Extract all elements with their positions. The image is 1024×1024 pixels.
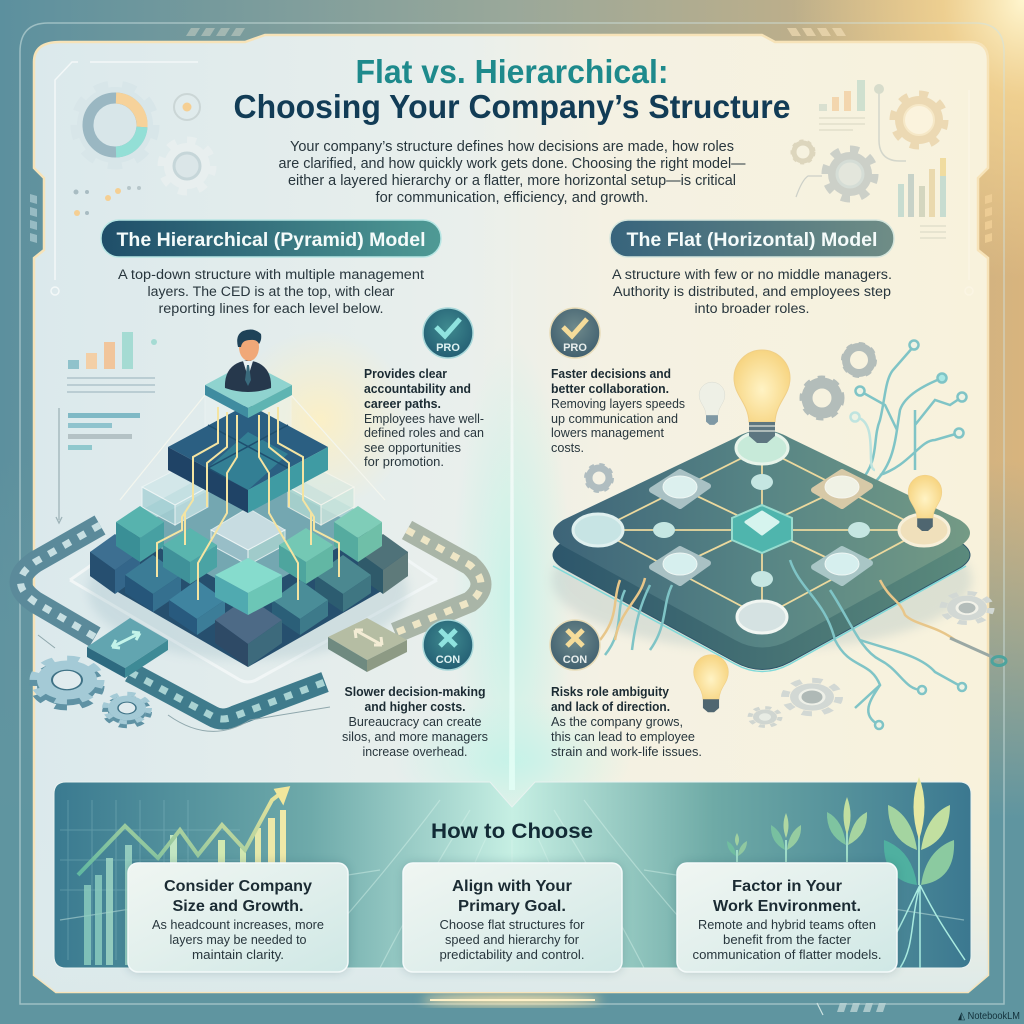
badge: hierarchical con (423, 620, 473, 670)
text: flat con: As the company grows, (551, 715, 683, 729)
thin arrows (38, 635, 330, 731)
icon: small grey bulb (699, 382, 725, 425)
card: primary goal: predictability and control. (440, 948, 584, 962)
intro paragraph (278, 139, 746, 206)
heading: flat model (610, 220, 894, 257)
intro paragraph: Your company’s structure defines how decisions are made, how roles (290, 139, 734, 155)
central divider (392, 230, 632, 860)
hierarchical description (118, 267, 424, 316)
text: hierarchical con (342, 685, 488, 759)
gears behind platform (586, 344, 875, 491)
text: hierarchical pro: career paths. (364, 397, 441, 411)
intro paragraph: are clarified, and how quickly work gets done. Choosing the right model— (278, 156, 746, 172)
text: hierarchical con: Slower decision-making (344, 685, 486, 699)
decorative top-right gears and charts (792, 80, 973, 295)
flat description (612, 267, 892, 316)
text: flat pro: Faster decisions and (551, 367, 671, 381)
gears (34, 659, 149, 726)
card: company size (128, 863, 348, 972)
card: company size: As headcount increases, more (152, 918, 324, 932)
flat description: Authority is distributed, and employees step (613, 284, 891, 299)
title: Choosing Your Company’s Structure (234, 88, 790, 125)
card: work environment: Factor in Your (732, 878, 842, 895)
intro paragraph: either a layered hierarchy or a flatter, more horizontal setup—is critical (288, 173, 736, 189)
direction buttons (87, 618, 407, 678)
card: primary goal: Align with Your (452, 878, 572, 895)
text: flat pro: up communication and (551, 412, 678, 426)
text: flat con: strain and work-life issues. (551, 745, 702, 759)
mid underlay (116, 452, 382, 596)
card: work environment: benefit from the facter (723, 933, 851, 947)
badge: flat pro (550, 308, 600, 358)
text: hierarchical con: and higher costs. (364, 700, 466, 714)
text: flat pro: Removing layers speeds (551, 397, 685, 411)
text: hierarchical pro: defined roles and can (364, 426, 484, 440)
reporting wires (157, 407, 339, 600)
mini chart left (56, 332, 157, 523)
heading: hierarchical model (101, 220, 441, 257)
platform nodes (573, 432, 949, 633)
how to choose banner (54, 777, 971, 968)
text: hierarchical con: silos, and more managers (342, 730, 488, 744)
card: work environment: Work Environment. (713, 898, 861, 915)
title (234, 53, 790, 125)
badge: hierarchical pro (423, 308, 473, 358)
text: flat pro: costs. (551, 441, 584, 455)
card: primary goal: Choose flat structures for (440, 918, 584, 932)
card: primary goal: Primary Goal. (458, 898, 566, 915)
plants (727, 777, 965, 968)
text: flat pro (551, 367, 685, 455)
heading: hierarchical model: The Hierarchical (Pyramid) Model (116, 230, 426, 251)
badge: flat pro: PRO (563, 342, 587, 354)
back row cubes (90, 534, 408, 667)
card: work environment: communication of flatter models. (692, 948, 882, 962)
large upper block (168, 404, 328, 513)
text: flat con (551, 685, 702, 759)
heading: flat model: The Flat (Horizontal) Model (626, 230, 878, 251)
dark underlay (90, 470, 408, 667)
pyramid illustration (20, 330, 481, 731)
text: hierarchical pro: see opportunities (364, 441, 461, 455)
road (20, 525, 481, 719)
hierarchical description: A top-down structure with multiple management (118, 267, 424, 282)
text: hierarchical pro: for promotion. (364, 455, 444, 469)
text: flat con: Risks role ambiguity (551, 685, 669, 699)
card: company size: Consider Company (164, 878, 312, 895)
label: How to Choose (431, 820, 593, 843)
gears front (750, 593, 991, 726)
flat platform illustration (552, 340, 1006, 729)
text: flat con: this can lead to employee (551, 730, 695, 744)
title: Flat vs. Hierarchical: (356, 53, 668, 90)
text: hierarchical pro (364, 367, 484, 469)
text: hierarchical pro: accountability and (364, 382, 471, 396)
growth chart (60, 788, 288, 965)
decorative top-left gears (51, 62, 213, 295)
card: work environment: Remote and hybrid teams often (698, 918, 876, 932)
text: hierarchical con: Bureaucracy can create (348, 715, 482, 729)
flat description: into broader roles. (694, 301, 810, 316)
icon: right bulb (908, 475, 942, 531)
top plate (205, 362, 292, 418)
platform (553, 452, 970, 670)
text: flat pro: better collaboration. (551, 382, 669, 396)
card: company size: layers may be needed to (170, 933, 307, 947)
card: primary goal: speed and hierarchy for (445, 933, 579, 947)
badge: flat con: CON (563, 654, 587, 666)
intro paragraph: for communication, efficiency, and growth. (376, 190, 648, 206)
card: company size: Size and Growth. (172, 898, 304, 915)
lower circuit wires (600, 560, 1006, 729)
hierarchical description: reporting lines for each level below. (158, 301, 384, 316)
badge: hierarchical con: CON (436, 654, 460, 666)
text: hierarchical pro: Provides clear (364, 367, 447, 381)
icon: CEO figure (225, 330, 271, 392)
icon: large bulb (734, 350, 790, 443)
icon: lower bulb (694, 655, 728, 712)
hierarchical description: layers. The CED is at the top, with clear (148, 284, 395, 299)
badge: hierarchical pro: PRO (436, 342, 460, 354)
platform connections (598, 448, 924, 617)
card: primary goal (403, 863, 622, 972)
text: hierarchical pro: Employees have well- (364, 412, 484, 426)
badge: flat con (550, 620, 600, 670)
panel lower tint (34, 600, 988, 992)
glass column (205, 385, 291, 470)
card: work environment (677, 863, 897, 972)
perspective lines (60, 800, 964, 968)
flat description: A structure with few or no middle managers. (612, 267, 892, 282)
card: company size: maintain clarity. (192, 948, 284, 962)
glass cubes (142, 470, 354, 565)
teal cubes (116, 506, 382, 615)
upper circuit wires (850, 340, 966, 487)
glass pyramid outline (120, 395, 385, 500)
text: hierarchical con: increase overhead. (362, 745, 468, 759)
text: flat con: and lack of direction. (551, 700, 670, 714)
text: flat pro: lowers management (551, 426, 665, 440)
